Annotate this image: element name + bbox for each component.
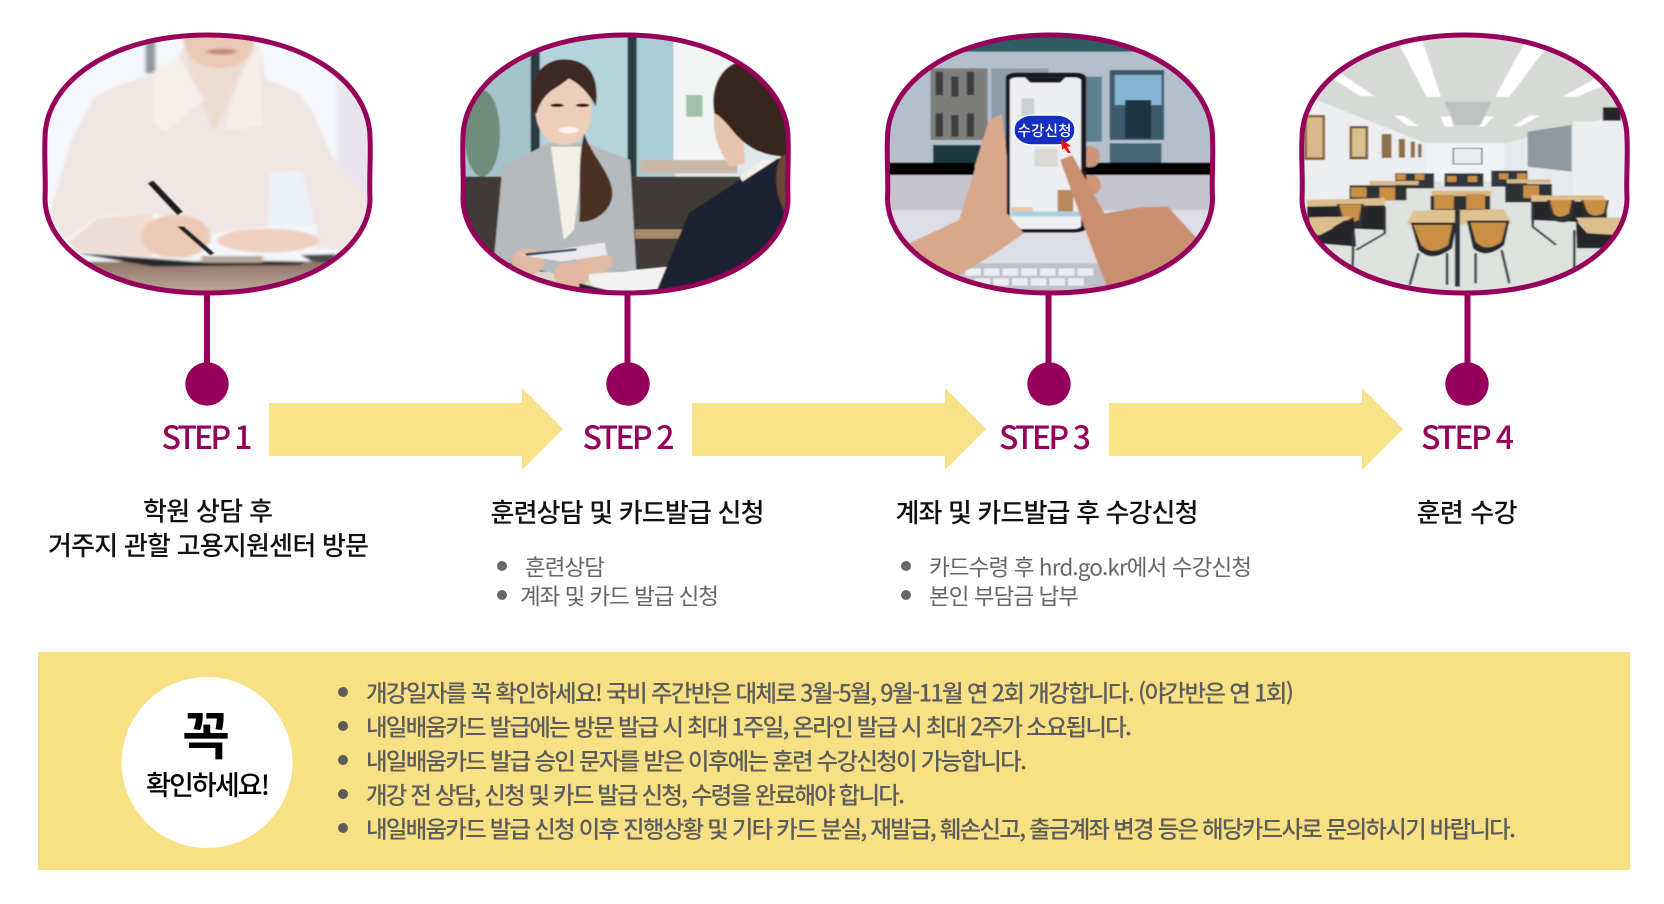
label: step 1: STEP 1 [162, 413, 252, 459]
notice list: 내일배움카드 발급 승인 문자를 받은 이후에는 훈련 수강신청이 가능합니다. [366, 742, 1027, 776]
photo 1: applicant writing at a desk [48, 38, 368, 290]
badge: must check: 확인하세요! [146, 764, 270, 803]
notice list: 내일배움카드 발급 신청 이후 진행상황 및 기타 카드 분실, 재발급, 훼손신고, 출금계좌 변경 등은 해당카드사로 문의하시기 바랍니다. [366, 810, 1516, 844]
list: step 3 details [901, 550, 1252, 612]
arrow: step 1 to 2 [269, 388, 563, 470]
list: step 2 details [497, 550, 719, 612]
heading: step 1 description: 거주지 관할 고용지원센터 방문 [48, 526, 369, 563]
centre desk [1407, 209, 1512, 225]
notice list [338, 674, 1516, 844]
desks near [1307, 198, 1385, 207]
frame: photo 3 [887, 35, 1213, 293]
connector: step 1 stem and dot [185, 295, 229, 406]
heading: step 4 description: 훈련 수강 [1416, 493, 1518, 530]
button: 수강신청 [1014, 115, 1075, 153]
panel: notice [38, 652, 1630, 870]
arrow: step 3 to 4 [1109, 388, 1403, 470]
label: step 2: STEP 2 [582, 413, 674, 459]
photo 4: empty classroom [1304, 38, 1625, 290]
heading: step 2 description: 훈련상담 및 카드발급 신청 [490, 493, 764, 530]
notice list: 개강 전 상담, 신청 및 카드 발급 신청, 수령을 완료해야 합니다. [366, 776, 905, 810]
label: step 3: STEP 3 [999, 413, 1091, 459]
button: 수강신청: 수강신청 [1018, 120, 1072, 141]
list: step 3 details: 카드수령 후 hrd.go.kr에서 수강신청 [929, 550, 1252, 582]
label: step 4: STEP 4 [1421, 413, 1514, 459]
photo 3: hands tapping a phone in front of a laptop [890, 38, 1210, 290]
photo 2: two women in a counselling session [465, 38, 786, 290]
heading: step 1 description: 학원 상담 후 [143, 492, 273, 528]
heading: step 1 description [48, 492, 369, 563]
arrow: step 2 to 3 [692, 388, 986, 470]
frame: photo 1 [45, 35, 370, 293]
list: step 3 details: 본인 부담금 납부 [929, 580, 1079, 612]
frame: photo 2 [463, 35, 788, 293]
connector: step 4 stem and dot [1445, 295, 1489, 406]
connector: step 3 stem and dot [1027, 295, 1071, 406]
heading: step 3 description: 계좌 및 카드발급 후 수강신청 [896, 493, 1198, 530]
desks and chairs far [1395, 171, 1528, 188]
badge: must check [122, 677, 292, 848]
connector: step 2 stem and dot [606, 295, 650, 406]
frame: photo 4 [1302, 35, 1627, 293]
notice list: 내일배움카드 발급에는 방문 발급 시 최대 1주일, 온라인 발급 시 최대 2주가 소요됩니다. [366, 708, 1132, 742]
notice list: 개강일자를 꼭 확인하세요! 국비 주간반은 대체로 3월-5월, 9월-11월 연 2회 개강합니다. (야간반은 연 1회) [366, 674, 1294, 708]
list: step 2 details: 계좌 및 카드 발급 신청 [520, 580, 719, 612]
badge: must check: 꼭 [182, 695, 230, 770]
list: step 2 details: 훈련상담 [525, 550, 605, 582]
